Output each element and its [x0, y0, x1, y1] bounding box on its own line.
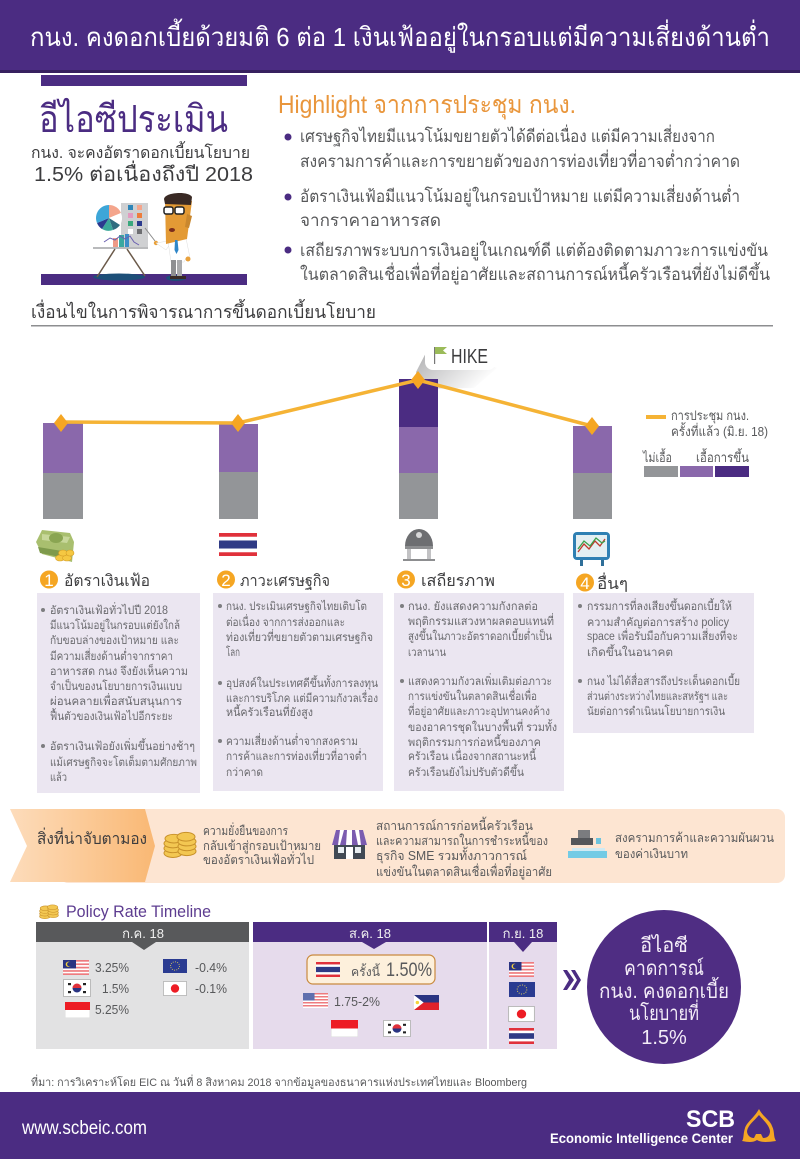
flag: Indonesia rate	[65, 1002, 129, 1018]
legend: การประชุม กนง.	[671, 408, 749, 424]
panel: economy: ท่องเที่ยวที่ขยายตัวตามเศรษฐกิจ	[226, 629, 373, 644]
panel: economy: ความเสี่ยงด้านต่ำจากสงคราม	[226, 733, 358, 748]
panel: economy: โลก	[226, 645, 240, 659]
text: watch 3: สงครามการค้าและความผันผวน	[615, 831, 774, 845]
bullet 2: อัตราเงินเฟ้อมีแนวโน้มอยู่ในกรอบเป้าหมาย แต่มีความเสี่ยงด้านต่ำ	[300, 184, 740, 207]
icon: chart board	[573, 532, 610, 566]
text: assessment line 2: 1.5% ต่อเนื่องถึงปี 2018	[34, 160, 253, 186]
panel: inflation: อัตราเงินเฟ้อทั่วไปปี 2018	[50, 602, 168, 617]
panel: economy	[213, 593, 383, 791]
legend: เอื้อการขึ้น	[696, 448, 749, 465]
text: watch 2: และความสามารถในการชำระหนี้ของ	[376, 831, 548, 848]
heading: 4 others: 4	[580, 574, 590, 593]
panel: others: ส่วนต่างระหว่างไทยและสหรัฐฯ และ	[587, 690, 728, 703]
bullet 3: เสถียรภาพระบบการเงินอยู่ในเกณฑ์ดี แต่ต้องติดตามภาวะการแข่งขัน	[300, 240, 768, 261]
panel: things to watch	[10, 809, 785, 883]
panel: inflation: อัตราเงินเฟ้อยังเพิ่มขึ้นอย่างช้าๆ	[50, 738, 195, 753]
bar: economy	[219, 424, 258, 519]
bar: stability	[399, 379, 438, 519]
heading: 3 stability: 3	[401, 571, 411, 590]
heading: 1 inflation	[40, 570, 150, 590]
panel: economy: กว่าคาด	[226, 767, 263, 779]
bullet 1: เศรษฐกิจไทยมีแนวโน้มขยายตัวได้ดีต่อเนื่อง แต่มีความเสี่ยงจาก	[300, 124, 715, 147]
arrow label: สิ่งที่น่าจับตามอง	[37, 827, 147, 848]
panel: others: space เพื่อรับมือกับความเสี่ยงที่จะ	[587, 628, 738, 643]
text: watch 1: ของอัตราเงินเฟ้อทั่วไป	[203, 851, 314, 867]
panel: September: ก.ย. 18	[503, 926, 543, 941]
callout: EIC forecast circle: อีไอซี	[640, 934, 688, 957]
legend: ไม่เอื้อ	[642, 448, 672, 465]
icon: container ship	[568, 830, 607, 858]
panel: others: นัยต่อการดำเนินนโยบายการเงิน	[587, 704, 725, 718]
text: watch 1	[203, 822, 321, 867]
panel: economy: กนง. ประเมินเศรษฐกิจไทยเติบโต	[226, 599, 367, 613]
panel: stability: ครัวเรือนยังไม่ปรับตัวดีขึ้น	[408, 764, 524, 779]
flag: Japan rate	[163, 981, 227, 996]
panel: stability: พฤติกรรมแสวงหาผลตอบแทนที่	[408, 613, 554, 628]
panel: others: กนง ไม่ได้สื่อสารถึงประเด็นดอกเบี้ย	[587, 673, 740, 688]
panel: stability: การแข่งขันในตลาดสินเชื่อเพื่อ	[408, 688, 537, 703]
icon: money	[36, 530, 74, 562]
flag: US rate	[303, 993, 380, 1009]
panel: others: ความสำคัญต่อการสร้าง policy	[587, 616, 729, 629]
flag: Japan	[509, 1006, 534, 1022]
flag: Indonesia	[331, 1020, 358, 1037]
panel: August	[253, 922, 487, 1049]
text: watch 1: กลับเข้าสู่กรอบเป้าหมาย	[203, 839, 321, 854]
flag: Euro	[509, 982, 535, 997]
callout: EIC forecast circle: 1.5%	[641, 1027, 687, 1049]
heading: EIC assessment: อีไอซีประเมิน	[39, 98, 228, 141]
bullet 3	[284, 240, 770, 285]
heading: policy rate timeline: Policy Rate Timeline	[66, 902, 211, 921]
panel: others	[573, 593, 754, 733]
text: watch 2	[376, 816, 552, 880]
panel: inflation: มีแนวโน้มอยู่ในกรอบแต่ยังใกล้	[50, 618, 180, 632]
bullet 3: ในตลาดสินเชื่อเพื่อที่อยู่อาศัยและสถานการณ์หนี้ครัวเรือนที่ยังไม่ดีขึ้น	[300, 262, 770, 285]
icon: coins	[164, 832, 196, 858]
text: watch 2: ธุรกิจ SME รวมทั้งภาวการณ์	[376, 846, 527, 864]
callout: hike	[416, 342, 497, 389]
panel: economy: ต่อเนื่อง จากการส่งออกและ	[226, 614, 345, 629]
panel: stability: เวลานาน	[408, 647, 446, 659]
panel: July	[36, 922, 249, 1049]
panel: inflation: แล้ว	[50, 771, 67, 784]
panel: inflation: แม้เศรษฐกิจจะโตเต็มตามศักยภาพ	[50, 754, 197, 769]
icon: building	[403, 529, 435, 561]
source note: ที่มา: การวิเคราะห์โดย EIC ณ วันที่ 8 สิงหาคม 2018 จากข้อมูลของธนาคารแห่งประเทศไทยและ Bloomberg	[31, 1074, 527, 1089]
panel: highlights	[278, 91, 770, 285]
header band	[0, 0, 800, 73]
flag: Korea rate: 1.5%	[102, 981, 129, 996]
callout: hike: HIKE	[451, 346, 488, 368]
heading: policy conditions: เงื่อนไขในการพิจารณาการขึ้นดอกเบี้ยนโยบาย	[31, 299, 376, 322]
heading: 4 others: อื่นๆ	[597, 572, 628, 593]
flag: Malaysia	[509, 962, 534, 977]
arrow label	[10, 809, 155, 882]
heading: 3 stability: เสถียรภาพ	[421, 572, 495, 590]
callout: Thailand this meeting: 1.50%	[386, 960, 432, 981]
flag: Thailand	[509, 1028, 534, 1044]
panel: inflation: จำเป็นของนโยบายการเงินแบบ	[50, 678, 182, 693]
text: assessment line 1: กนง. จะคงอัตราดอกเบี้ยนโยบาย	[31, 141, 250, 162]
footer	[0, 1092, 800, 1159]
panel: stability: ของอาคารชุดในบางพื้นที่ รวมทั้ง	[408, 719, 557, 734]
heading: 3 stability	[397, 570, 495, 590]
legend	[642, 408, 768, 477]
panel: others: กรรมการที่ลงเสียงขึ้นดอกเบี้ยให้	[587, 598, 732, 613]
flag: Malaysia rate: 3.25%	[95, 960, 129, 975]
callout: Thailand this meeting: ครั้งนี้	[351, 963, 381, 979]
panel: stability: สูงขึ้นในภาวะอัตราดอกเบี้ยต่ำเป็น	[408, 628, 552, 643]
text: watch 3	[615, 831, 774, 861]
panel: stability: พฤติกรรมการก่อหนี้ของภาค	[408, 734, 541, 749]
flag: Korea rate	[64, 980, 129, 996]
panel: inflation: ผ่อนคลายเพื่อสนับสนุนการ	[50, 693, 182, 708]
flag: Indonesia rate: 5.25%	[95, 1002, 129, 1017]
heading: 1 inflation: 1	[44, 571, 54, 590]
bullet 1: สงครามการค้าและการขยายตัวของการท่องเที่ยวที่อาจต่ำกว่าคาด	[300, 149, 740, 171]
text: watch 3: ของค่าเงินบาท	[615, 847, 688, 861]
flag: Euro rate	[163, 959, 227, 975]
flag: US rate: 1.75-2%	[334, 994, 380, 1009]
panel: economy: อุปสงค์ในประเทศดีขึ้นทั้งการลงทุน	[226, 675, 378, 690]
flag: Philippines	[414, 995, 439, 1010]
legend: ครั้งที่แล้ว (มิ.ย. 18)	[671, 422, 768, 439]
line: previous meeting	[54, 371, 599, 435]
flag: Korea	[384, 1020, 410, 1037]
callout: EIC forecast circle: นโยบายที่	[629, 999, 699, 1025]
heading: 2 economy	[217, 570, 330, 590]
panel: inflation: มีความเสี่ยงด้านต่ำจากราคา	[50, 648, 173, 663]
brand name: SCB	[686, 1106, 735, 1133]
heading: 2 economy: ภาวะเศรษฐกิจ	[240, 573, 330, 590]
heading: 1 inflation: อัตราเงินเฟ้อ	[64, 572, 150, 590]
bar: others	[573, 426, 612, 519]
panel: stability: แสดงความกังวลเพิ่มเติมต่อภาวะ	[408, 673, 552, 688]
bar: inflation	[43, 423, 83, 519]
icon: presenter illustration	[93, 193, 192, 281]
panel: inflation	[37, 593, 200, 793]
brand tagline: Economic Intelligence Center	[550, 1130, 734, 1146]
bullet 2	[284, 184, 740, 230]
panel: September	[489, 922, 557, 1049]
flag: Euro rate: -0.4%	[195, 960, 227, 975]
icon: store	[332, 830, 367, 859]
text: watch 2: แข่งขันในตลาดสินเชื่อเพื่อที่อยู่อาศัย	[376, 863, 552, 880]
heading: 4 others	[576, 572, 628, 593]
flag: Japan rate: -0.1%	[195, 981, 227, 996]
icon: Thai flag	[219, 533, 257, 556]
panel: August: ส.ค. 18	[349, 926, 391, 941]
bullet 2: จากราคาอาหารสด	[300, 211, 441, 230]
icon: SCB logo	[742, 1109, 776, 1142]
callout: Thailand this meeting	[307, 955, 435, 984]
panel: economy: การค้าและการท่องเที่ยวที่อาจต่ำ	[226, 748, 367, 763]
panel: economy: และการบริโภค แต่มีความกังวลเรื่อง	[226, 690, 378, 705]
flag: Malaysia rate	[63, 960, 129, 975]
callout: EIC forecast circle: คาดการณ์	[624, 957, 704, 980]
panel: inflation: อาหารสด กนง จึงยังเห็นความ	[50, 663, 188, 678]
panel: stability: กนง. ยังแสดงความกังกลต่อ	[408, 601, 538, 613]
panel: July: ก.ค. 18	[122, 926, 164, 941]
chart: stacked bars	[43, 342, 612, 519]
panel: stability: ที่อยู่อาศัยและภาวะอุปทานคงค้าง	[408, 703, 550, 718]
callout: EIC forecast circle	[587, 910, 741, 1064]
callout: EIC forecast circle: กนง. คงดอกเบี้ย	[599, 977, 729, 1003]
panel: economy: หนี้ครัวเรือนที่ยังสูง	[226, 704, 313, 719]
panel: EIC assessment	[31, 75, 253, 285]
heading: 2 economy: 2	[221, 571, 231, 590]
panel: others: เกิดขึ้นในอนาคต	[587, 644, 673, 659]
bullet 1	[284, 124, 740, 171]
heading: highlights: Highlight จากการประชุม กนง.	[278, 91, 576, 120]
panel: inflation: กับขอบล่างของเป้าหมาย และ	[50, 634, 179, 647]
panel: stability	[394, 593, 564, 791]
text: watch 2: สถานการณ์การก่อหนี้ครัวเรือน	[376, 816, 533, 833]
website: www.scbeic.com	[21, 1118, 147, 1139]
panel: stability: ครัวเรือน เนื่องจากสถานะหนี้	[408, 748, 537, 763]
panel: inflation: ฟื้นตัวของเงินเฟ้อไปอีกระยะ	[50, 708, 173, 723]
text: watch 1: ความยั่งยืนของการ	[203, 822, 288, 838]
arrow: chevrons	[563, 970, 581, 990]
